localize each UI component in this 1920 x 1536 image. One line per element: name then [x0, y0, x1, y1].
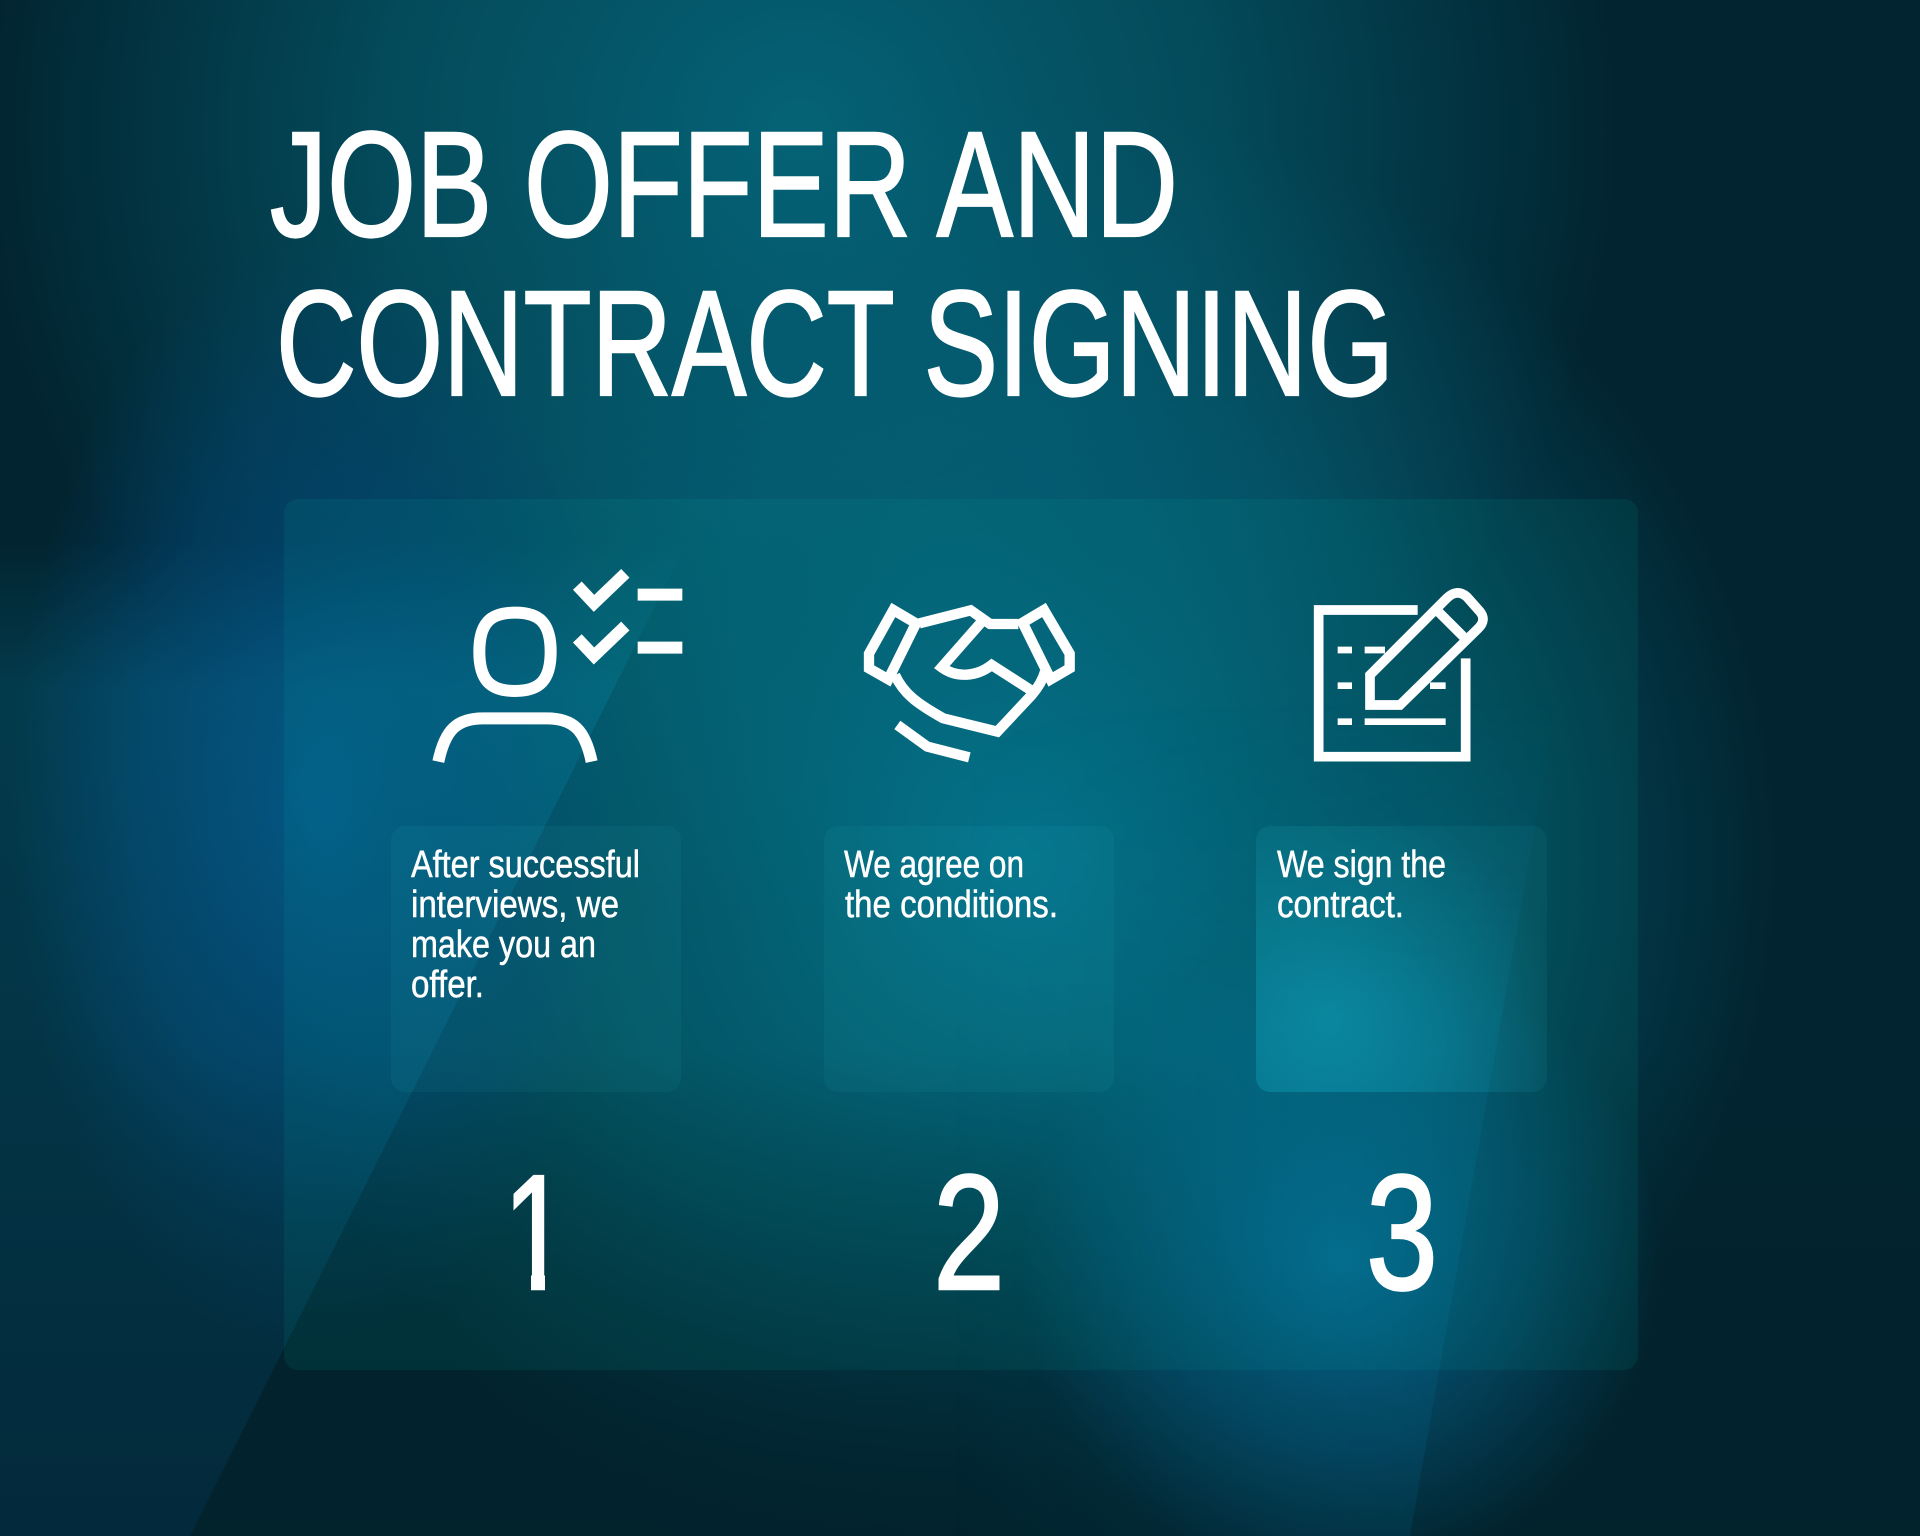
card: step 3: contract. [1277, 884, 1404, 926]
icon: person with checklist [438, 573, 682, 762]
title: JOB OFFER AND [270, 100, 1178, 268]
icon: handshake [869, 610, 1070, 757]
card: step 1: After successful [411, 844, 640, 886]
light beam: left [0, 540, 688, 1536]
number 3: 3 [1366, 1141, 1438, 1324]
card: step 2: the conditions. [845, 884, 1058, 926]
icon: document with pencil [1319, 593, 1483, 757]
card: step 2 [824, 826, 1114, 1092]
card: step 1: offer. [411, 964, 484, 1006]
card: step 3 [1256, 826, 1547, 1092]
card: step 3: We sign the [1277, 844, 1446, 886]
card: step 2: We agree on [844, 844, 1024, 886]
number 2: 2 [933, 1141, 1005, 1324]
title [270, 100, 1394, 427]
number 1: 1 [503, 1141, 569, 1324]
panel: steps [284, 499, 1638, 1370]
card: step 1: make you an [411, 924, 596, 966]
light beam: right [1174, 933, 1514, 1536]
title: CONTRACT SIGNING [276, 259, 1394, 427]
card: step 1 [391, 826, 681, 1092]
card: step 1: interviews, we [411, 884, 619, 926]
